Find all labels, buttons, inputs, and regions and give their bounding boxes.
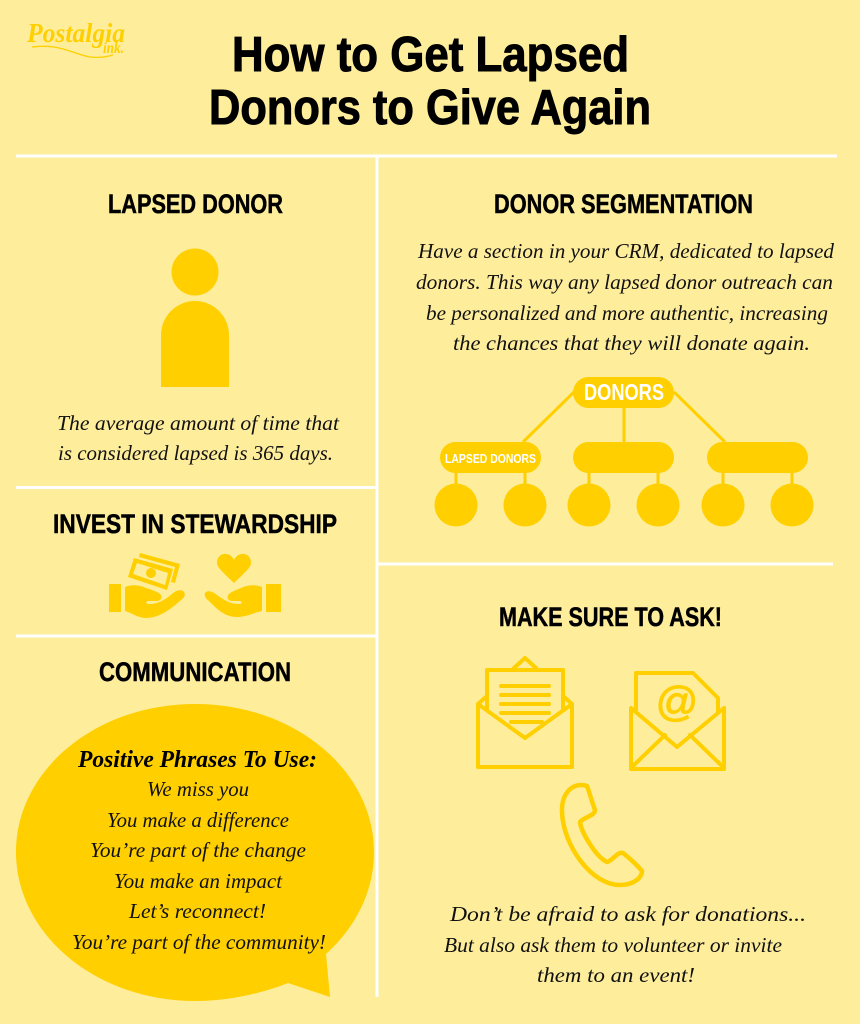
- heading: make sure to ask: MAKE SURE TO ASK!: [499, 602, 722, 632]
- speech bubble: [16, 704, 374, 1001]
- panel: donor segmentation: [416, 189, 834, 526]
- logo: Postalgia Ink: ink.: [103, 40, 124, 57]
- panel: communication: [16, 657, 374, 1001]
- phrases list: Let’s reconnect!: [128, 899, 266, 923]
- panel: invest in stewardship: [53, 509, 337, 618]
- heading: donor segmentation: DONOR SEGMENTATION: [494, 189, 753, 219]
- text: segmentation description: be personalized and more authentic, increasing: [426, 301, 828, 325]
- icon: hand with heart: [205, 554, 281, 617]
- title: How to Get Lapsed: [232, 28, 629, 82]
- panel: make sure to ask: [444, 602, 806, 987]
- heading: lapsed donor: LAPSED DONOR: [108, 189, 283, 219]
- icon: telephone handset: [562, 785, 642, 885]
- text: lapsed definition: [57, 411, 340, 465]
- label: lapsed donors: LAPSED DONORS: [445, 451, 536, 466]
- text: segmentation description: Have a section in your CRM, dedicated to lapsed: [417, 239, 834, 263]
- text: lapsed definition: is considered lapsed is 365 days.: [58, 441, 333, 465]
- phrases list: You’re part of the community!: [72, 930, 326, 954]
- text: segmentation description: the chances that they will donate again.: [453, 331, 810, 355]
- phrases list: You make an impact: [114, 869, 283, 893]
- text: ask description: them to an event!: [537, 963, 695, 987]
- phrases list: You’re part of the change: [90, 838, 306, 862]
- text: ask description: But also ask them to volunteer or invite: [444, 933, 782, 957]
- title: [209, 28, 651, 135]
- label: donors: DONORS: [584, 379, 664, 405]
- tree chart: [434, 377, 814, 526]
- text: lapsed definition: The average amount of time that: [57, 411, 340, 435]
- heading: communication: COMMUNICATION: [99, 657, 291, 687]
- phrases list: We miss you: [147, 777, 249, 801]
- icon: hand with money: [109, 553, 185, 618]
- icon: email envelope: [631, 673, 724, 769]
- heading: invest in stewardship: INVEST IN STEWARDSHIP: [53, 509, 337, 539]
- text: ask description: Don’t be afraid to ask for donations...: [449, 902, 806, 926]
- logo: Postalgia Ink: Postalgia: [26, 18, 125, 48]
- text: segmentation description: donors. This way any lapsed donor outreach can: [416, 270, 833, 294]
- text: ask description: [444, 902, 806, 987]
- phrases list: You make a difference: [107, 808, 289, 832]
- icon: person: [161, 248, 229, 387]
- title: Donors to Give Again: [209, 81, 651, 135]
- icon: email envelope: @: [656, 678, 698, 725]
- phrases list: [72, 777, 326, 954]
- phrases heading: Positive Phrases To Use:: [77, 747, 317, 773]
- text: segmentation description: [416, 239, 834, 355]
- panel: lapsed donor: [57, 189, 340, 465]
- icon: open envelope with letter: [478, 658, 572, 767]
